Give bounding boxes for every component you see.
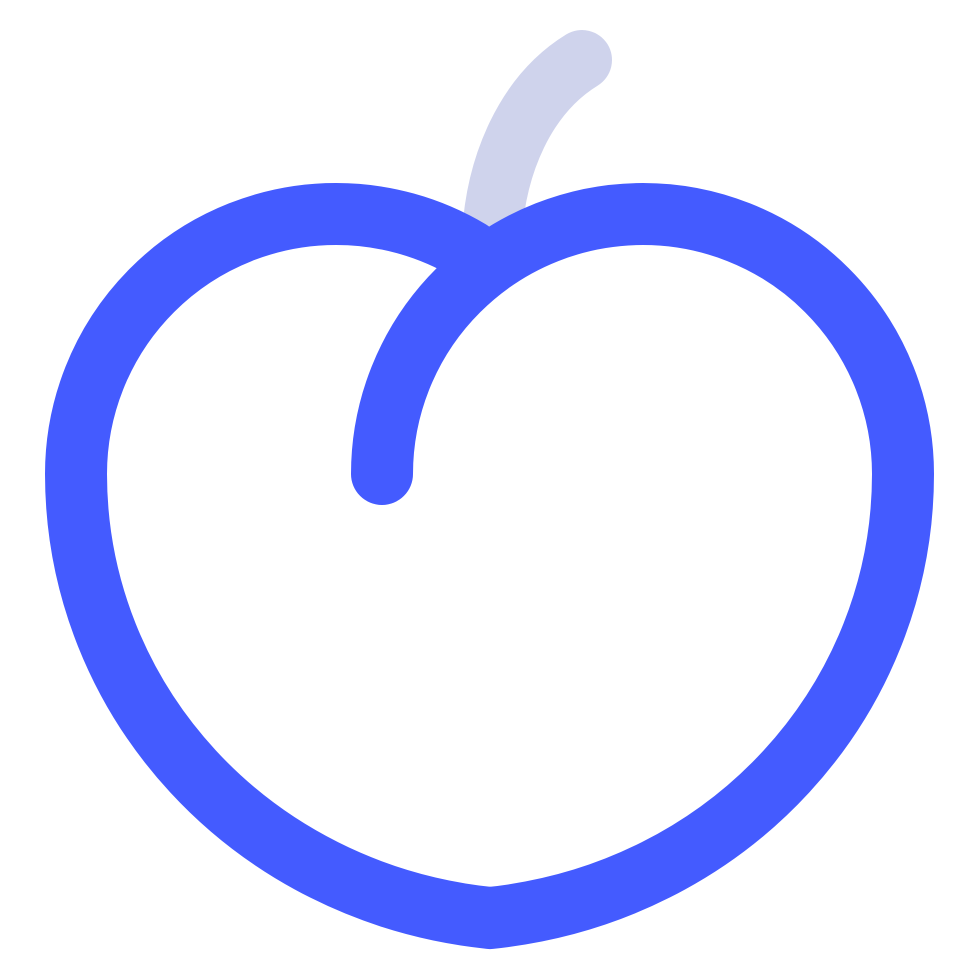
icon: peach body fill xyxy=(76,214,903,918)
icon: peach stem xyxy=(492,60,582,235)
icon: peach outline and crease xyxy=(76,214,903,918)
